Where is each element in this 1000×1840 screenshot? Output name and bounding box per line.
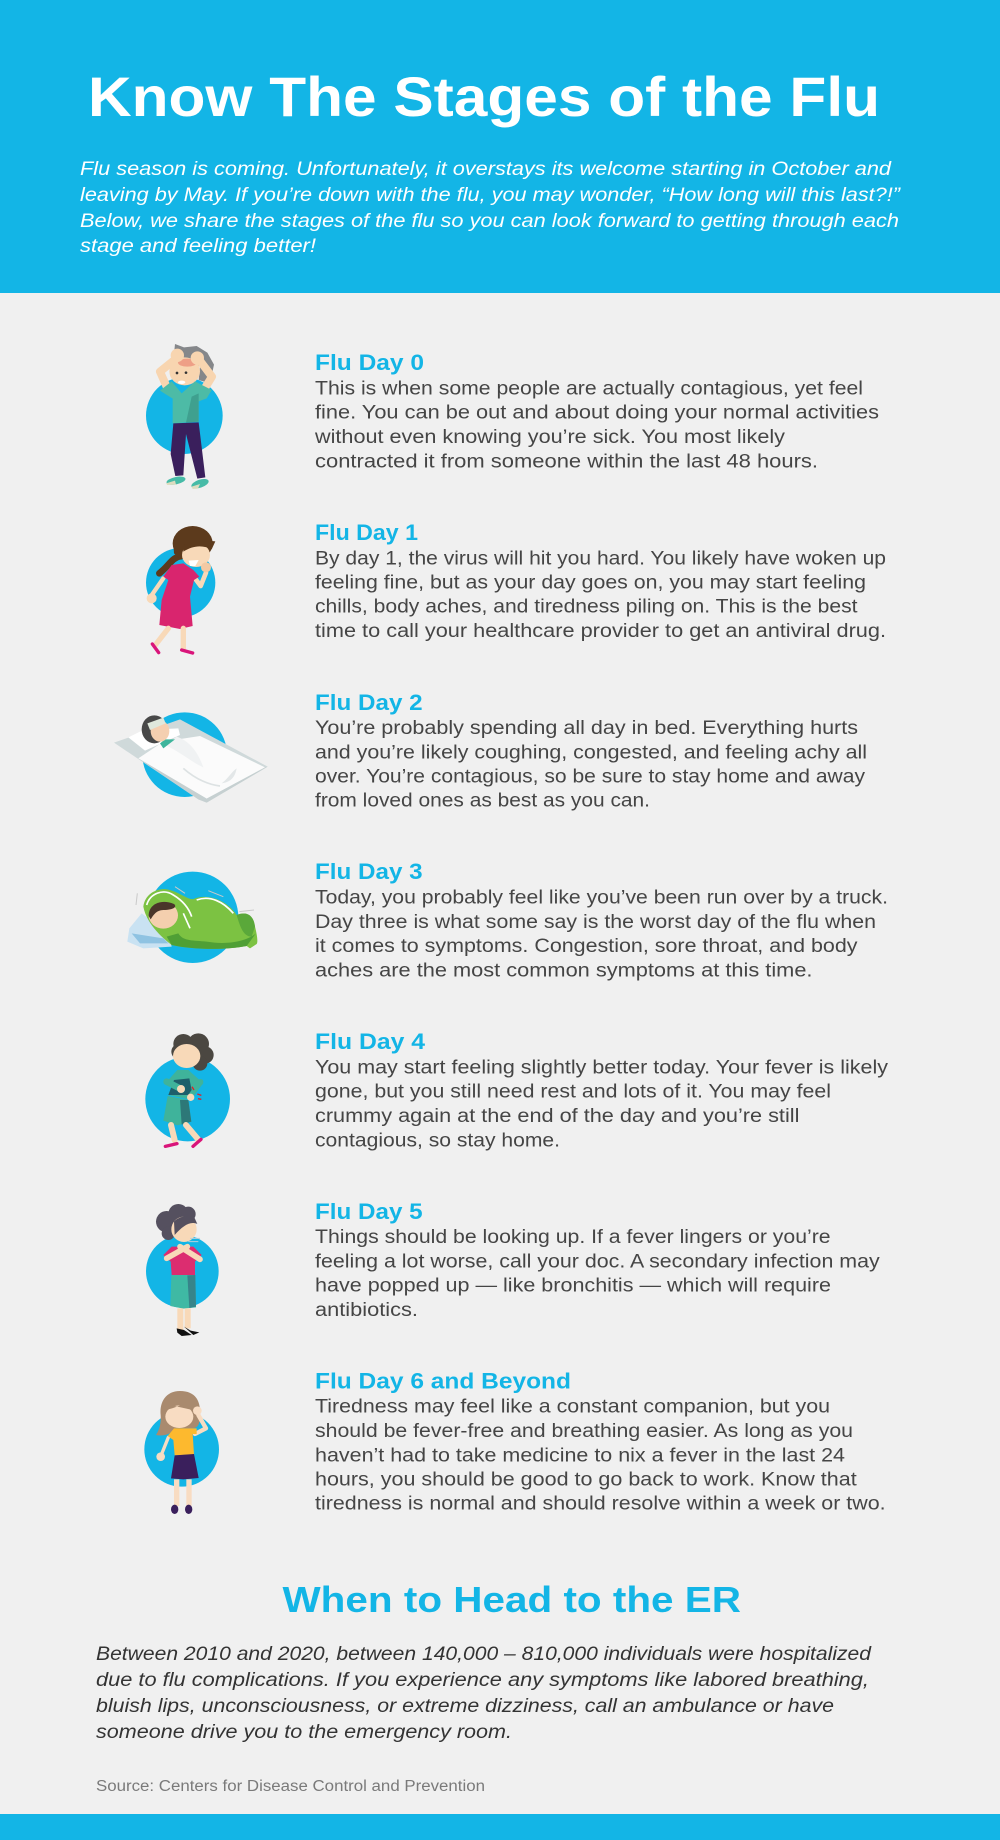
section: flu day 4 (315, 1029, 889, 1151)
body text: Day three is what some say is the worst day of the flu when (315, 912, 876, 933)
section: flu day 1 (315, 520, 886, 642)
heading: Flu Day 1 (315, 520, 418, 545)
heading: Flu Day 4 (315, 1029, 426, 1054)
heading: Flu Day 6 and Beyond (315, 1368, 571, 1393)
body text: tiredness is normal and should resolve within a week or two. (315, 1494, 886, 1515)
body text: crummy again at the end of the day and you’re still (315, 1106, 799, 1127)
ER body text (96, 1643, 872, 1743)
body text: and you’re likely coughing, congested, and feeling achy all (315, 742, 867, 763)
intro text: stage and feeling better! (80, 235, 317, 257)
body text: have popped up — like bronchitis — which will require (315, 1276, 831, 1297)
icon: sick person in bed, day 2 (114, 712, 268, 803)
heading: Flu Day 3 (315, 859, 423, 884)
ER body text: due to flu complications. If you experience any symptoms like labored breathing, (96, 1669, 869, 1691)
body text: By day 1, the virus will hit you hard. You likely have woken up (315, 548, 886, 569)
intro text (80, 158, 902, 257)
body text: time to call your healthcare provider to get an antiviral drug. (315, 621, 886, 642)
body text: contracted it from someone within the last 48 hours. (315, 451, 818, 472)
ER body text: someone drive you to the emergency room. (96, 1721, 512, 1743)
icon: person in green sleeping bag, day 3 (127, 872, 257, 963)
section: flu day 5 (315, 1199, 880, 1321)
section: flu day 0 (314, 350, 879, 472)
body text: feeling fine, but as your day goes on, you may start feeling (315, 573, 866, 594)
icon: woman with body aches, day 4 (145, 1033, 230, 1146)
body text: without even knowing you’re sick. You most likely (314, 427, 786, 448)
body text: contagious, so stay home. (315, 1130, 560, 1151)
body text: Today, you probably feel like you’ve been run over by a truck. (315, 888, 888, 909)
body text (315, 1057, 889, 1151)
body text: it comes to symptoms. Congestion, sore throat, and body (315, 936, 858, 957)
heading: Flu Day 2 (315, 690, 423, 715)
body text: gone, but you still need rest and lots of it. You may feel (315, 1082, 831, 1103)
body text: hours, you should be good to go back to work. Know that (315, 1470, 857, 1491)
body text: from loved ones as best as you can. (315, 791, 650, 812)
icon: coughing girl, day 1 (146, 526, 215, 653)
body text: antibiotics. (315, 1300, 418, 1321)
icon: woman with sore throat, day 5 (146, 1204, 219, 1336)
body text: You may start feeling slightly better today. Your fever is likely (315, 1057, 889, 1078)
body text: should be fever-free and breathing easier. As long as you (315, 1421, 853, 1442)
heading: Flu Day 5 (315, 1199, 423, 1224)
section: flu day 2 (315, 690, 867, 812)
body text: You’re probably spending all day in bed. Everything hurts (315, 718, 858, 739)
intro text: Below, we share the stages of the flu so you can look forward to getting through each (80, 210, 899, 232)
body text: haven’t had to take medicine to nix a fever in the last 24 (315, 1445, 845, 1466)
body text (315, 718, 867, 812)
body text: feeling a lot worse, call your doc. A secondary infection may (315, 1251, 880, 1272)
body text (314, 378, 879, 472)
body text (315, 1227, 880, 1321)
heading: Flu Day 0 (315, 350, 424, 375)
body text: Tiredness may feel like a constant companion, but you (315, 1397, 830, 1418)
body text (315, 888, 888, 981)
title: Know The Stages of the Flu (88, 65, 880, 128)
footer band (0, 1814, 1000, 1840)
intro text: Flu season is coming. Unfortunately, it overstays its welcome starting in October and (80, 158, 892, 180)
source line: Source: Centers for Disease Control and Prevention (96, 1778, 485, 1795)
body text: over. You’re contagious, so be sure to stay home and away (315, 767, 866, 788)
body text: aches are the most common symptoms at this time. (315, 960, 812, 981)
body text: This is when some people are actually contagious, yet feel (315, 378, 863, 399)
ER body text: Between 2010 and 2020, between 140,000 – 810,000 individuals were hospitalized (96, 1643, 872, 1665)
icon: tired girl, day 6 (144, 1391, 219, 1514)
section: flu day 3 (315, 859, 888, 981)
body text: Things should be looking up. If a fever lingers or you’re (315, 1227, 831, 1248)
body text: chills, body aches, and tiredness piling on. This is the best (315, 597, 858, 618)
ER body text: bluish lips, unconsciousness, or extreme dizziness, call an ambulance or have (96, 1695, 834, 1717)
section: flu day 6 and beyond (315, 1368, 886, 1515)
intro text: leaving by May. If you’re down with the flu, you may wonder, “How long will this last?!” (80, 184, 902, 206)
body text (315, 1397, 886, 1515)
body text (315, 548, 886, 642)
heading: when to head to the ER: When to Head to the ER (282, 1579, 741, 1620)
panel: header (0, 0, 1000, 293)
body text: fine. You can be out and about doing your normal activities (315, 403, 879, 424)
icon: dizzy man, day 0 (146, 344, 223, 490)
